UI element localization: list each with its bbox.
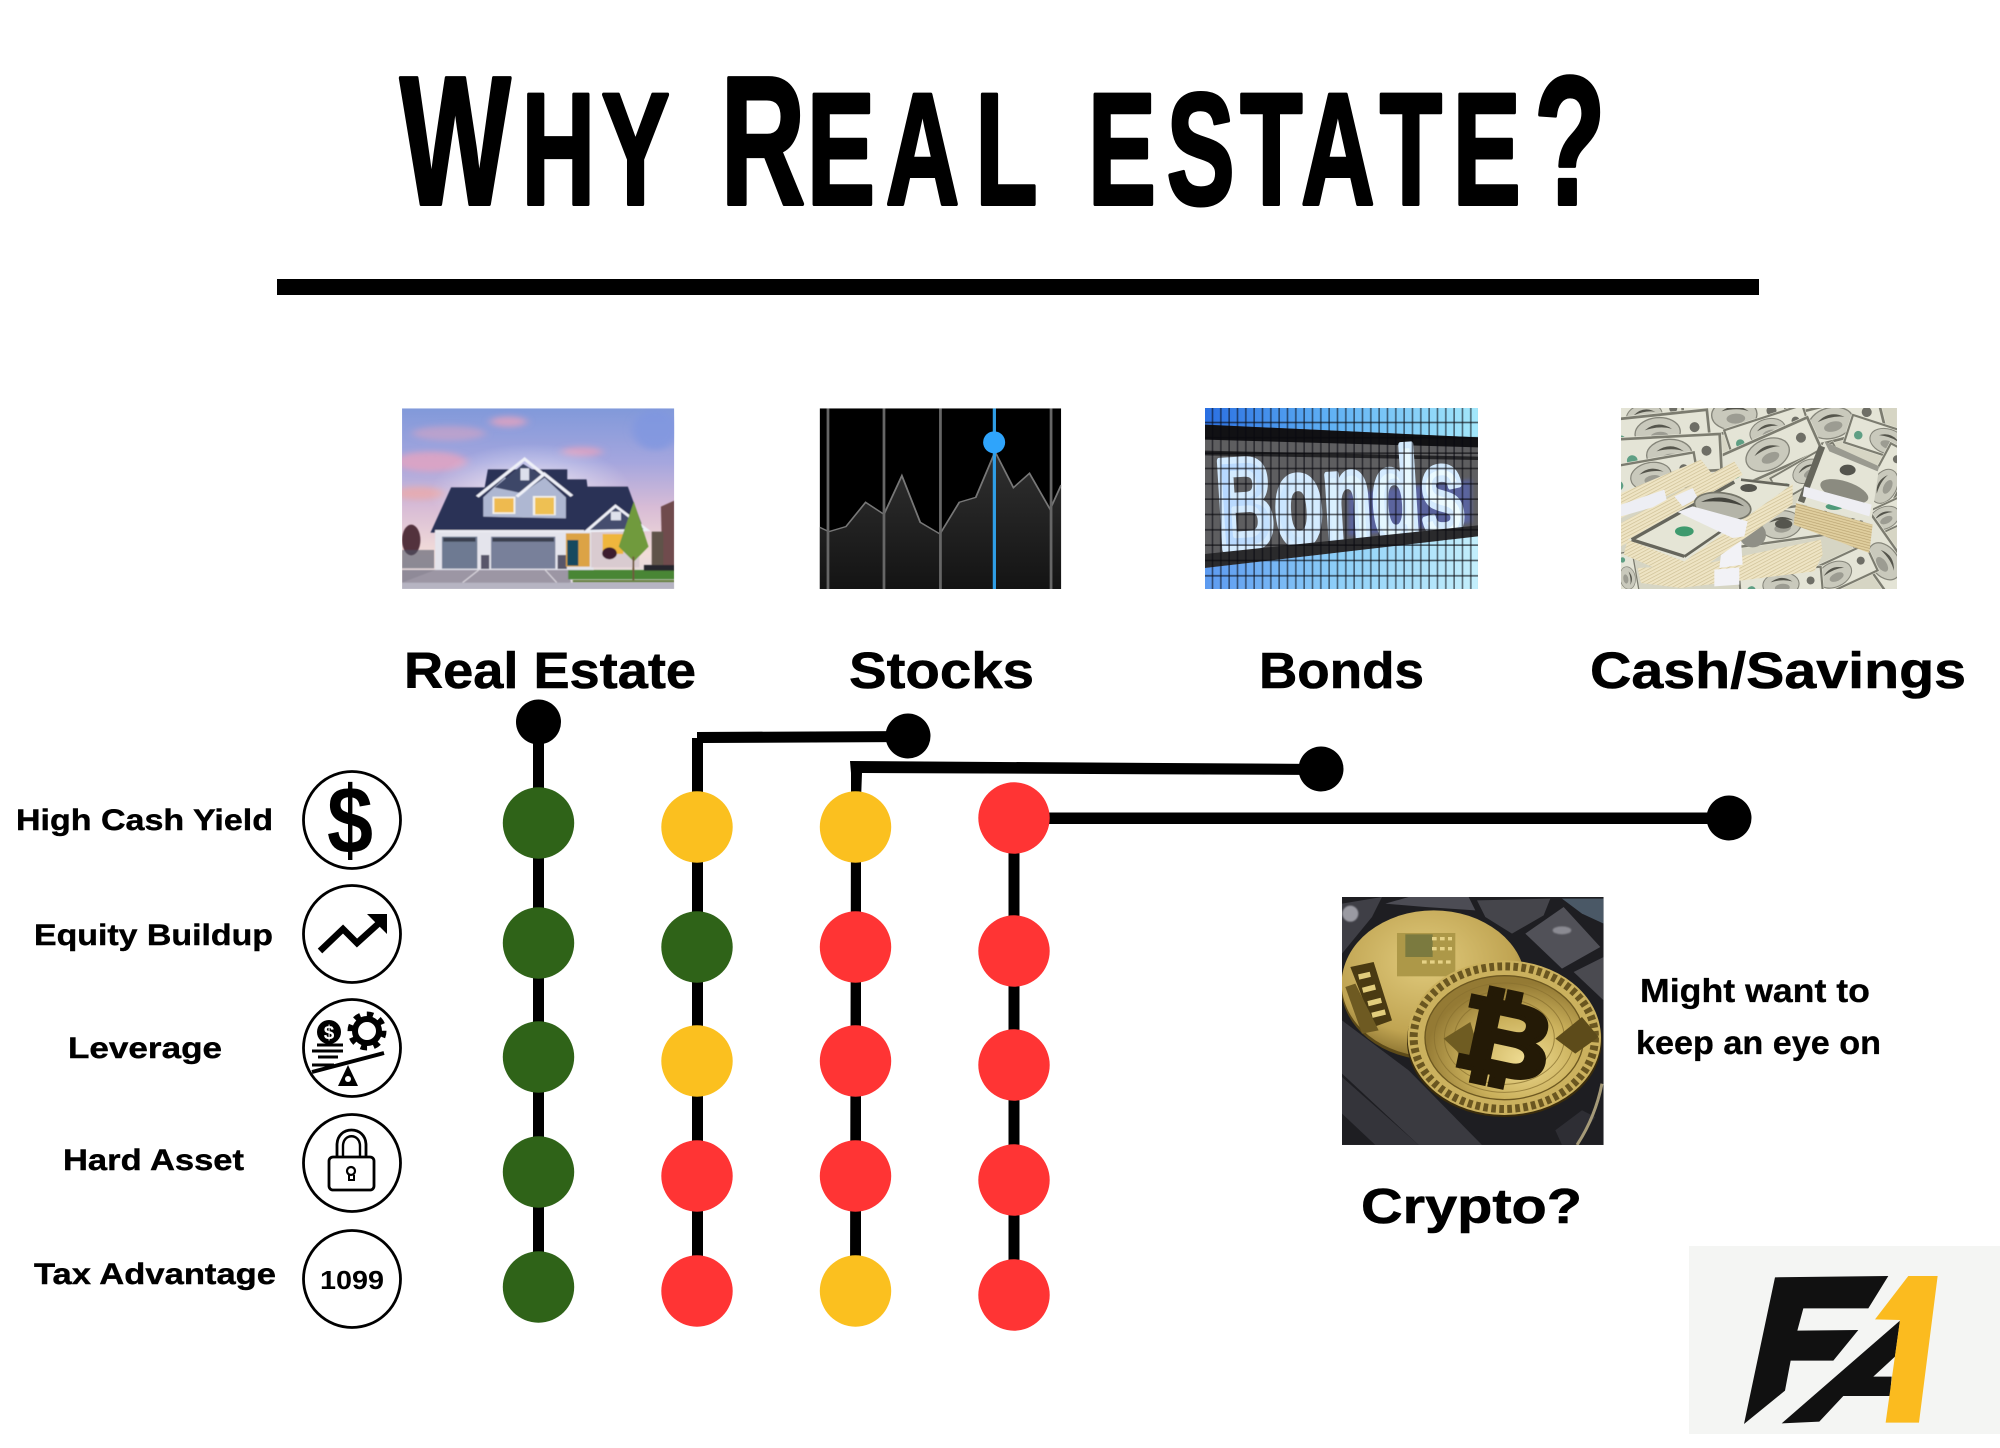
icon: dollar: [304, 767, 400, 874]
image: bitcoin on keyboard: [1341, 897, 1604, 1145]
title divider: [277, 279, 1759, 295]
icon: rising arrow: [304, 886, 400, 982]
logo: F1: [1689, 1246, 2000, 1434]
row label: Hard Asset: Hard Asset: [63, 1144, 244, 1177]
image: bonds screen: [1205, 408, 1478, 589]
row label: Leverage: Leverage: [68, 1032, 222, 1065]
heading: Crypto?: Crypto?: [1361, 1180, 1582, 1234]
icon: leverage scale: $: [324, 1023, 335, 1044]
icon: 1099 form: 1099: [320, 1265, 384, 1295]
column: real estate ratings: [503, 700, 574, 1323]
column heading: Real Estate: Real Estate: [404, 642, 696, 699]
column: stocks ratings: [661, 714, 930, 1327]
row label: High Cash Yield: High Cash Yield: [16, 804, 273, 837]
image: stock chart: [820, 408, 1061, 589]
title: ?: [1534, 38, 1606, 243]
icon: padlock: [304, 1114, 400, 1212]
callout: might want to: Might want to: [1640, 972, 1870, 1009]
title: EAL: [807, 61, 1038, 239]
callout: keep an eye on: keep an eye on: [1636, 1024, 1881, 1061]
column heading: Stocks: Stocks: [849, 642, 1034, 699]
image: bonds screen: Bonds: [1212, 420, 1469, 578]
icon: leverage scale: [304, 1000, 400, 1096]
title: HY: [522, 61, 669, 239]
row label: Tax Advantage: Tax Advantage: [34, 1258, 276, 1291]
title: W: [400, 38, 511, 243]
image: bitcoin on keyboard: ₿: [1446, 972, 1563, 1105]
icon: 1099 form: [304, 1230, 400, 1328]
column: cash ratings: [978, 782, 1752, 1331]
title: R: [721, 38, 805, 243]
icon: dollar: $: [327, 767, 373, 874]
title: ESTATE: [1088, 61, 1521, 239]
column: bonds ratings: [820, 746, 1344, 1327]
column heading: Cash/Savings: Cash/Savings: [1590, 642, 1966, 699]
column heading: Bonds: Bonds: [1259, 642, 1424, 699]
row label: Equity Buildup: Equity Buildup: [34, 919, 273, 952]
image: house: [394, 408, 678, 589]
image: cash pile: [1621, 408, 1897, 589]
